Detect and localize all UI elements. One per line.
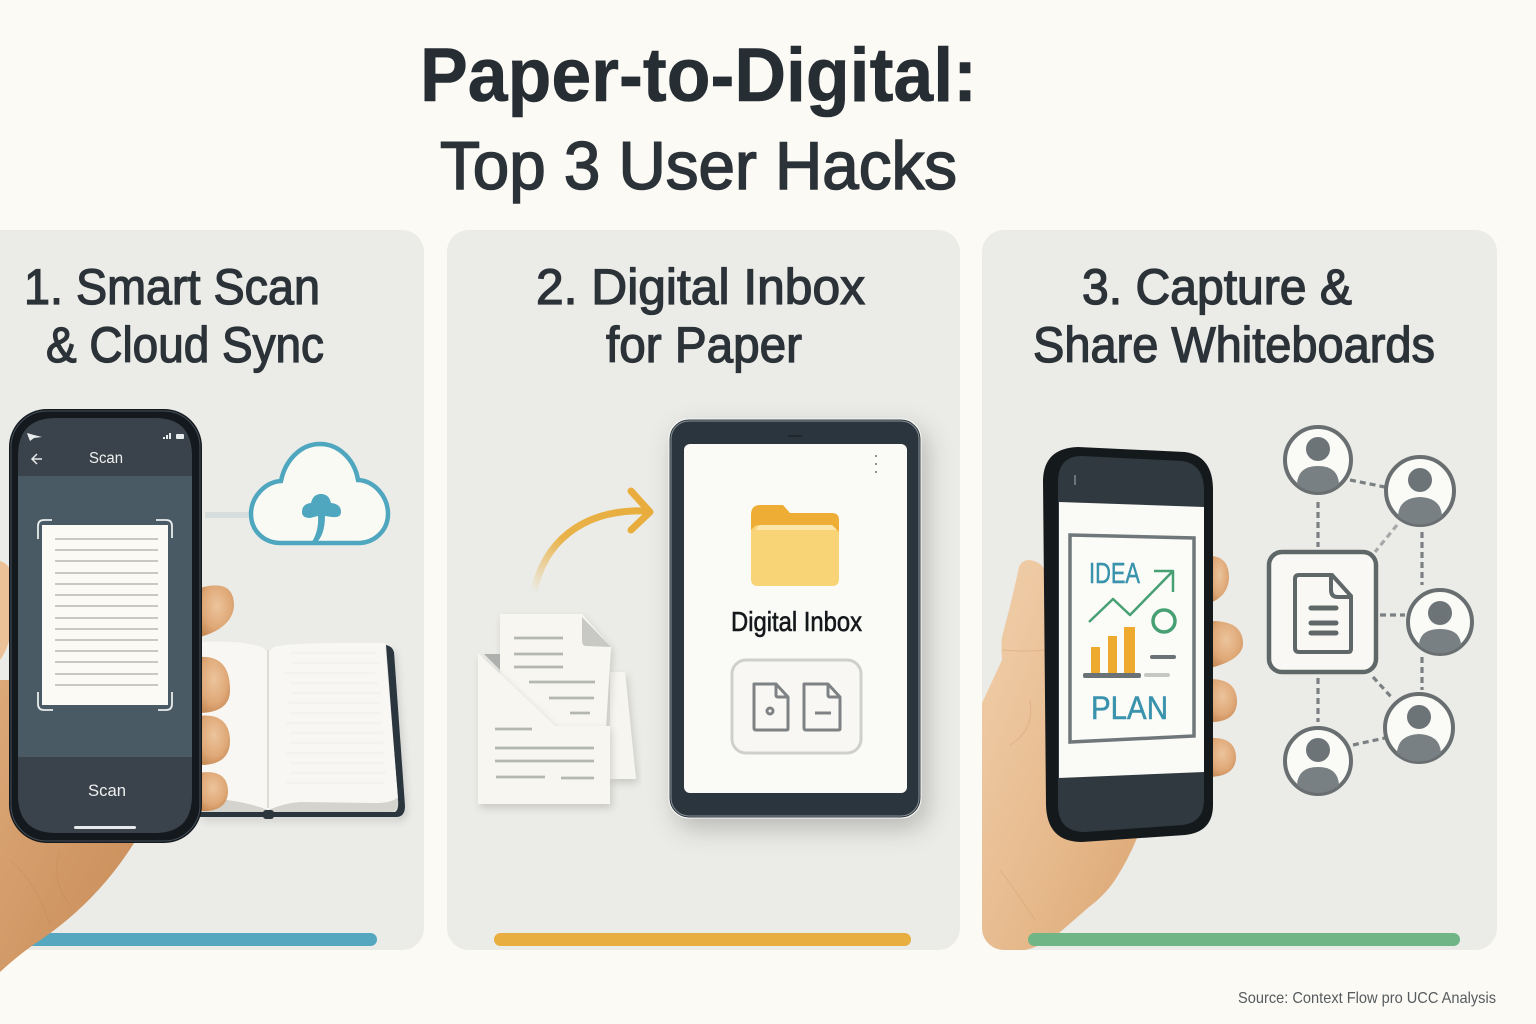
file tray bbox=[732, 660, 861, 753]
panel: capture and share whiteboards bbox=[982, 230, 1497, 950]
heading: hack 1: 1. Smart Scan bbox=[24, 259, 320, 315]
heading: hack 1: & Cloud Sync bbox=[46, 317, 324, 373]
tablet bbox=[669, 419, 921, 818]
heading: hack 2: for Paper bbox=[606, 317, 802, 373]
home indicator bbox=[74, 826, 136, 829]
chart: rising line bbox=[1089, 571, 1175, 632]
hand holding phone bbox=[982, 556, 1243, 950]
heading: hack 3 bbox=[1033, 259, 1435, 373]
icon: document bbox=[1295, 575, 1351, 652]
text: digital inbox label: Digital Inbox bbox=[731, 606, 862, 637]
title bbox=[420, 33, 977, 204]
avatar: user one bbox=[1285, 427, 1351, 493]
avatar: user five bbox=[1285, 728, 1351, 794]
title: Top 3 User Hacks bbox=[440, 128, 957, 204]
icon: back arrow bbox=[32, 454, 42, 464]
text: scan button: Scan bbox=[88, 781, 126, 800]
arrow: paper to tablet bbox=[534, 491, 650, 592]
chart: bars bbox=[1083, 627, 1176, 678]
heading: hack 3: 3. Capture & bbox=[1082, 259, 1352, 315]
title: Paper-to-Digital: bbox=[420, 33, 977, 118]
phone: whiteboard capture bbox=[1043, 447, 1213, 842]
progress bar: amber bbox=[494, 933, 911, 946]
heading: hack 2 bbox=[536, 259, 865, 373]
scanned document bbox=[42, 525, 168, 705]
progress bar: green bbox=[1028, 933, 1460, 946]
icon: open notebook bbox=[200, 642, 405, 819]
icon: cloud bbox=[251, 444, 388, 543]
heading: hack 1 bbox=[24, 259, 324, 373]
text: scan header: Scan bbox=[89, 450, 123, 467]
icon: file two bbox=[804, 684, 840, 730]
avatar: user three bbox=[1408, 590, 1472, 654]
collaboration network bbox=[1269, 427, 1472, 794]
icon: menu dots bbox=[875, 455, 877, 473]
icon: folder bbox=[751, 505, 839, 586]
text: plan: PLAN bbox=[1091, 690, 1168, 726]
progress bar: blue bbox=[20, 933, 377, 946]
hand holding phone bbox=[0, 561, 234, 972]
avatar: user two bbox=[1386, 457, 1454, 525]
heading: hack 2: 2. Digital Inbox bbox=[536, 259, 865, 315]
shared document tile bbox=[1269, 552, 1376, 672]
phone: scan screen bbox=[9, 409, 202, 843]
panel: smart scan and cloud sync bbox=[0, 230, 424, 972]
whiteboard photo bbox=[1070, 535, 1194, 742]
icon: file one bbox=[754, 684, 788, 730]
avatar: user four bbox=[1385, 694, 1453, 762]
panel: digital inbox bbox=[447, 230, 960, 950]
icon: status bar bbox=[27, 433, 184, 441]
source note: Source: Context Flow pro UCC Analysis bbox=[1238, 990, 1496, 1007]
connector: phone to cloud bbox=[205, 512, 250, 518]
text: idea: IDEA bbox=[1089, 558, 1140, 590]
stack of paper documents bbox=[478, 614, 636, 804]
dashed connectors bbox=[1318, 480, 1422, 745]
heading: hack 3: Share Whiteboards bbox=[1033, 317, 1435, 373]
scan frame corners bbox=[38, 520, 172, 710]
